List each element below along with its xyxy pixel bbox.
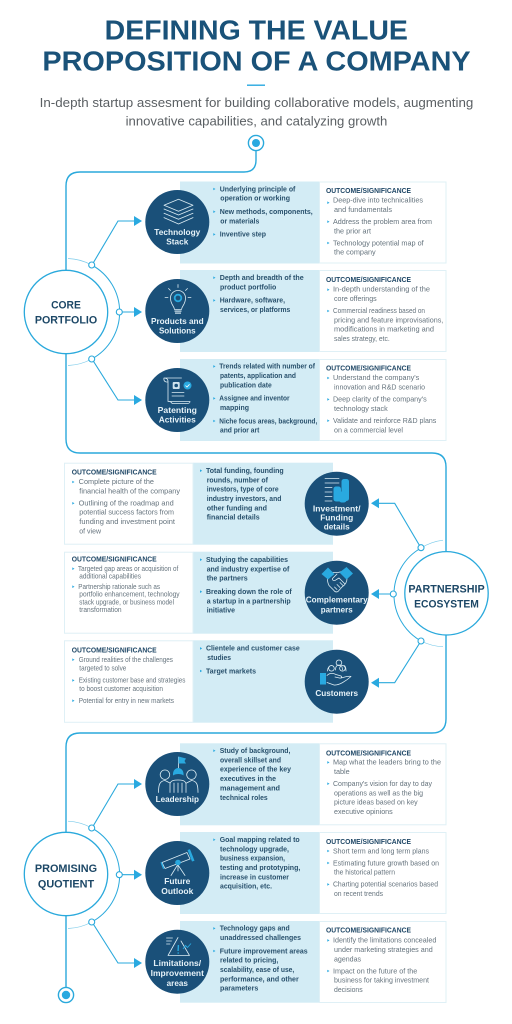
outcome box: patenting activities: technology stack <box>334 404 388 413</box>
icon circle: investment and funding details: Funding <box>320 513 353 523</box>
icon circle: limitations and improvement areas: Limitations/ <box>153 958 202 968</box>
key points: leadership: executives in the <box>220 774 276 783</box>
key points: patenting activities <box>213 362 317 435</box>
key points: technology stack: New methods, components, <box>220 207 313 216</box>
label: partnership ecosystem <box>405 552 488 635</box>
outcome box: limitations and improvement areas: under marketing strategies and <box>334 945 433 954</box>
key points: products and solutions: services, or platforms <box>220 305 290 314</box>
outcome box: technology stack: the prior art <box>334 226 371 235</box>
label: core portfolio <box>24 270 108 354</box>
key points: investment and funding details <box>200 466 284 522</box>
outcome box: future outlook: Estimating future growth based on <box>333 858 439 867</box>
outcome box: technology stack: Address the problem area from <box>333 217 432 226</box>
outcome box: technology stack: Technology potential map of <box>333 238 424 247</box>
key points: patenting activities: Trends related with number of <box>219 362 316 371</box>
key points: products and solutions: product portfolio <box>220 282 277 291</box>
outcome box: complementary partners: additional capabilities <box>79 572 141 581</box>
key points: patenting activities: mapping <box>220 403 249 412</box>
key points: limitations and improvement areas <box>213 924 308 993</box>
outcome box: complementary partners: Targeted gap areas or acquisition of <box>78 564 178 573</box>
label: core portfolio: CORE <box>51 300 81 312</box>
outcome box: leadership: operations as well as the big <box>334 788 423 797</box>
key points: future outlook: testing and prototyping, <box>220 863 300 872</box>
title <box>42 14 471 77</box>
outcome box: customers: Ground realities of the challenges <box>79 655 173 664</box>
outcome box: limitations and improvement areas: business for taking investment <box>334 976 429 985</box>
key points: patenting activities: Assignee and inventor <box>219 394 290 403</box>
outcome box: technology stack: and fundamentals <box>334 205 392 214</box>
panel: leadership <box>145 743 446 825</box>
outcome box: patenting activities: Understand the company's <box>333 373 420 382</box>
key points: customers <box>200 644 300 675</box>
outcome box: patenting activities: OUTCOME/SIGNIFICANCE <box>326 365 411 373</box>
label: promising quotient: QUOTIENT <box>38 878 94 890</box>
key points: products and solutions: Hardware, software, <box>220 296 285 305</box>
hub: partnership ecosystem <box>371 498 488 688</box>
key points: patenting activities: patents, application and <box>220 371 296 380</box>
outcome box: technology stack <box>320 182 446 263</box>
icon: start dot <box>248 135 264 151</box>
key points: investment and funding details: financial details <box>207 513 260 522</box>
outcome box: products and solutions: modifications in marketing and <box>334 325 434 334</box>
outcome box: investment and funding details <box>64 463 193 544</box>
subtitle: innovative capabilities, and catalyzing growth <box>126 114 387 129</box>
outcome box: customers: to boost customer acquisition <box>79 684 163 693</box>
key points: technology stack: Underlying principle of <box>220 184 296 193</box>
outcome box: patenting activities: on a commercial level <box>334 425 403 434</box>
label: core portfolio: PORTFOLIO <box>35 315 97 327</box>
key points: products and solutions: Depth and breadth of the <box>220 273 304 282</box>
key points: limitations and improvement areas: unaddressed challenges <box>220 933 301 942</box>
key points: future outlook: acquisition, etc. <box>220 882 272 891</box>
outcome box: technology stack: the company <box>334 248 376 257</box>
outcome box: products and solutions: In-depth understanding of the <box>333 285 430 294</box>
key points: limitations and improvement areas: related to pricing, <box>220 956 278 965</box>
outcome box: investment and funding details: financial health of the company <box>79 486 180 495</box>
outcome box: technology stack: OUTCOME/SIGNIFICANCE <box>326 187 411 195</box>
outcome box: leadership: Company's vision for day to day <box>333 779 432 788</box>
hub: promising quotient <box>24 779 142 968</box>
key points: investment and funding details: other funding and <box>207 503 267 512</box>
key points: leadership: experience of the key <box>220 765 291 774</box>
icon circle: limitations and improvement areas: areas <box>167 978 188 988</box>
icon circle: customers <box>305 650 369 714</box>
outcome box: limitations and improvement areas: agendas <box>334 954 361 963</box>
outcome box: future outlook: OUTCOME/SIGNIFICANCE <box>326 838 411 846</box>
icon circle: complementary partners: Complementary <box>306 595 368 605</box>
outcome box: products and solutions: sales strategy, etc. <box>334 334 390 343</box>
panel: technology stack <box>145 182 446 264</box>
key points: complementary partners: the partners <box>207 574 248 583</box>
key points: limitations and improvement areas: performance, and other <box>220 974 299 983</box>
label: partnership ecosystem: PARTNERSHIP <box>408 583 485 595</box>
outcome box: leadership: OUTCOME/SIGNIFICANCE <box>326 749 411 757</box>
connector: partnership ecosystem arcs and arrows <box>371 498 443 688</box>
key points: limitations and improvement areas: parameters <box>220 984 258 993</box>
icon circle: products and solutions <box>145 279 209 343</box>
key points: limitations and improvement areas: Future improvement areas <box>220 946 308 955</box>
outcome box: patenting activities <box>320 360 446 440</box>
outcome box: limitations and improvement areas: Impact on the future of the <box>333 966 417 975</box>
icon circle: patenting activities <box>145 368 209 432</box>
icon circle: technology stack <box>145 190 209 254</box>
label: partnership ecosystem: ECOSYSTEM <box>414 599 479 611</box>
outcome box: investment and funding details: Outlining of the roadmap and <box>79 498 174 507</box>
outcome box: future outlook <box>320 832 446 914</box>
outcome box: customers <box>64 641 193 722</box>
key points: leadership: management and <box>220 784 280 793</box>
outcome box: customers: Existing customer base and strategies <box>79 676 186 685</box>
outcome box: products and solutions: OUTCOME/SIGNIFICANCE <box>326 276 411 284</box>
icon circle: complementary partners: partners <box>321 604 353 614</box>
connector: main timeline line <box>66 151 446 987</box>
title: DEFINING THE VALUE <box>105 14 408 45</box>
icon: end dot <box>58 987 74 1003</box>
key points: patenting activities: publication date <box>220 380 272 389</box>
outcome box: customers: OUTCOME/SIGNIFICANCE <box>72 646 157 654</box>
key points: technology stack: Inventive step <box>220 230 267 239</box>
icon circle: investment and funding details: details <box>324 522 350 532</box>
key points: complementary partners: Breaking down the role of <box>206 587 292 596</box>
key points: leadership: Study of background, <box>220 746 290 755</box>
key points: limitations and improvement areas: Technology gaps and <box>220 924 290 933</box>
outcome box: investment and funding details: Complete picture of the <box>79 477 154 486</box>
label: promising quotient <box>24 832 108 916</box>
outcome box: customers: targeted to solve <box>79 664 126 673</box>
title: PROPOSITION OF A COMPANY <box>42 46 471 77</box>
icon circle: complementary partners <box>305 561 369 625</box>
icon circle: technology stack: Stack <box>166 237 189 247</box>
outcome box: limitations and improvement areas: decisions <box>334 985 363 994</box>
outcome box: future outlook: Short term and long term plans <box>333 846 429 855</box>
outcome box: complementary partners: transformation <box>79 605 122 614</box>
outcome box: future outlook: Charting potential scenarios based <box>333 880 438 889</box>
icon circle: technology stack: Technology <box>154 227 201 237</box>
key points: technology stack: operation or working <box>220 194 290 203</box>
outcome box: future outlook: on recent trends <box>334 889 383 898</box>
icon circle: limitations and improvement areas: Improvement <box>151 968 204 978</box>
outcome box: investment and funding details: funding and investment point <box>79 517 175 526</box>
key points: complementary partners: and industry expertise of <box>207 564 290 573</box>
key points: investment and funding details: investors, type of core <box>207 485 279 494</box>
key points: leadership: technical roles <box>220 793 268 802</box>
outcome box: patenting activities: Validate and reinforce R&D plans <box>333 416 437 425</box>
outcome box: complementary partners: stack upgrade, or business model <box>79 597 174 606</box>
panel: limitations and improvement areas <box>145 921 446 1003</box>
icon circle: products and solutions: Solutions <box>159 326 196 336</box>
key points: investment and funding details: rounds, number of <box>207 475 269 484</box>
icon circle: patenting activities: Activities <box>159 415 196 425</box>
outcome box: products and solutions: Commercial readiness based on <box>333 306 425 315</box>
outcome box: leadership: Map what the leaders bring to the <box>333 758 441 767</box>
outcome box: leadership: table <box>334 767 350 776</box>
key points: customers: studies <box>207 653 231 662</box>
key points: complementary partners: Studying the capabilities <box>206 555 288 564</box>
icon circle: investment and funding details <box>305 472 369 536</box>
panel: complementary partners <box>64 552 369 634</box>
key points: future outlook: Goal mapping related to <box>220 835 300 844</box>
key points: future outlook: increase in customer <box>220 872 289 881</box>
key points: customers: Clientele and customer case <box>206 644 300 653</box>
outcome box: products and solutions: core offerings <box>334 294 377 303</box>
icon circle: investment and funding details: Investment/ <box>313 504 361 514</box>
outcome box: leadership <box>320 744 446 825</box>
outcome box: investment and funding details: of view <box>79 526 102 535</box>
outcome box: technology stack: Deep-dive into technicalities <box>333 196 423 205</box>
outcome box: complementary partners <box>64 552 193 633</box>
key points: complementary partners: a startup in a partnership <box>207 596 291 605</box>
outcome box: products and solutions <box>320 270 446 352</box>
icon circle: patenting activities: Patenting <box>158 405 197 415</box>
outcome box: limitations and improvement areas: OUTCOME/SIGNIFICANCE <box>326 927 411 935</box>
key points: future outlook: technology upgrade, <box>220 844 289 853</box>
panel: future outlook <box>145 832 446 914</box>
key points: future outlook: business expansion, <box>220 854 285 863</box>
label: promising quotient: PROMISING <box>35 863 97 875</box>
icon circle: customers: Customers <box>315 688 358 698</box>
key points: complementary partners <box>200 555 292 615</box>
panel: customers <box>64 640 369 723</box>
subtitle <box>40 95 473 129</box>
outcome box: investment and funding details: potential success factors from <box>79 508 174 517</box>
hub: core portfolio <box>24 216 142 405</box>
icon circle: limitations and improvement areas <box>145 930 209 994</box>
panel: investment and funding details <box>64 463 369 545</box>
key points: investment and funding details: Total funding, founding <box>206 466 284 475</box>
key points: technology stack: or materials <box>220 216 259 225</box>
key points: patenting activities: and prior art <box>220 426 260 435</box>
key points: complementary partners: initiative <box>207 606 235 615</box>
outcome box: complementary partners: portfolio enhancement, technology <box>79 590 180 599</box>
outcome box: limitations and improvement areas <box>320 922 446 1002</box>
icon circle: leadership <box>145 752 209 816</box>
icon circle: leadership: Leadership <box>156 794 199 804</box>
outcome box: limitations and improvement areas: Identify the limitations concealed <box>333 936 436 945</box>
key points: limitations and improvement areas: scalability, ease of use, <box>220 965 294 974</box>
panel: patenting activities <box>145 359 446 441</box>
key points: patenting activities: Niche focus areas, background, <box>219 416 317 425</box>
key points: future outlook <box>213 835 300 891</box>
outcome box: customers: Potential for entry in new markets <box>79 696 174 705</box>
icon circle: future outlook <box>145 841 209 905</box>
outcome box: patenting activities: innovation and R&D scenario <box>334 383 425 392</box>
icon circle: products and solutions: Products and <box>151 316 204 326</box>
outcome box: complementary partners: OUTCOME/SIGNIFICANCE <box>72 556 157 564</box>
icon circle: future outlook: Outlook <box>161 886 194 896</box>
panel: products and solutions <box>145 270 446 352</box>
outcome box: leadership: picture ideas based on key <box>334 798 418 807</box>
key points: customers: Target markets <box>206 666 256 675</box>
outcome box: leadership: executive opinions <box>334 807 393 816</box>
key points: investment and funding details: industry investors, and <box>207 494 281 503</box>
outcome box: investment and funding details: OUTCOME/SIGNIFICANCE <box>72 468 157 476</box>
key points: products and solutions <box>213 273 304 314</box>
key points: leadership: overall skillset and <box>220 755 281 764</box>
key points: leadership <box>213 746 291 802</box>
icon circle: future outlook: Future <box>164 876 191 886</box>
outcome box: products and solutions: pricing and feature improvisations, <box>334 315 443 324</box>
connector: promising quotient arcs and arrows <box>68 779 142 968</box>
outcome box: patenting activities: Deep clarity of the company's <box>333 395 427 404</box>
subtitle: In-depth startup assesment for building collaborative models, augmenting <box>40 95 473 110</box>
key points: technology stack <box>213 184 313 239</box>
connector: core portfolio arcs and arrows <box>68 216 142 405</box>
outcome box: complementary partners: Partnership rationale such as <box>78 582 160 591</box>
outcome box: future outlook: the historical pattern <box>334 868 395 877</box>
